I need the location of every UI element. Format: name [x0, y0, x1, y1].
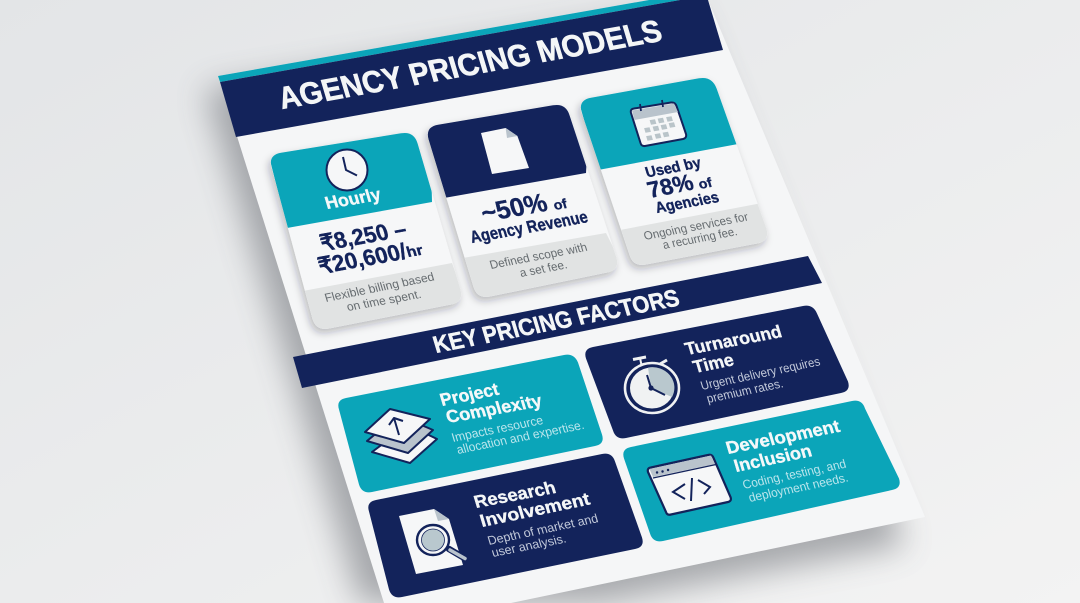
heading: Involvement — [477, 489, 592, 531]
description: on time spent. — [345, 287, 423, 314]
panel: Project Complexity — [338, 355, 603, 492]
icon: magnified document — [399, 509, 466, 574]
heading: Inclusion — [731, 440, 814, 476]
section banner: key pricing factors — [293, 256, 822, 388]
description: Coding, testing, and — [741, 457, 848, 492]
teal top stripe — [218, 0, 680, 82]
panel: Hourly card — [265, 133, 463, 337]
title banner — [220, 0, 723, 137]
usage stat: Used by — [643, 154, 704, 181]
usage stat — [643, 154, 721, 217]
heading — [471, 477, 592, 531]
heading: Time — [690, 349, 736, 377]
panel: Development Inclusion — [623, 401, 900, 541]
card label: Hourly — [322, 184, 383, 213]
description — [699, 354, 822, 406]
usage stat: Agencies — [653, 189, 721, 217]
price range: hr — [404, 243, 426, 261]
panel: Fixed fee card — [422, 105, 619, 305]
revenue stat: ~50% — [478, 189, 551, 228]
section heading: KEY PRICING FACTORS — [430, 286, 683, 359]
description: Ongoing services for — [642, 210, 750, 243]
heading: Turnaround — [682, 321, 784, 359]
description: Depth of market and — [486, 511, 600, 548]
usage stat: 78% — [644, 169, 696, 203]
heading: Development — [723, 416, 842, 458]
icon: clock — [326, 150, 368, 190]
price range: ₹20,600/ — [315, 238, 410, 279]
description: user analysis. — [490, 532, 568, 560]
description: a set fee. — [518, 257, 569, 280]
heading — [682, 321, 784, 377]
description: allocation and expertise. — [455, 418, 586, 457]
usage stat: of — [697, 175, 714, 192]
icon: stacked layers — [365, 409, 437, 463]
icon: stopwatch — [625, 357, 679, 413]
revenue stat: Agency Revenue — [468, 207, 590, 247]
heading: Project — [437, 379, 501, 410]
panel: Turnaround Time — [585, 306, 849, 438]
paper sheet — [218, 0, 925, 603]
description: Impacts resource — [450, 413, 545, 445]
description: a recurring fee. — [661, 224, 739, 252]
description: Flexible billing based — [323, 270, 436, 305]
heading: Complexity — [443, 390, 544, 427]
price range: ₹8,250 – — [317, 215, 409, 256]
price range — [315, 215, 426, 279]
description: premium rates. — [705, 376, 785, 406]
heading: Research — [471, 477, 558, 512]
icon: code window — [648, 455, 731, 515]
description: deployment needs. — [747, 471, 850, 505]
revenue stat: of — [552, 196, 569, 213]
revenue stat — [468, 189, 590, 247]
panel: Retainer card — [575, 78, 769, 273]
heading — [723, 416, 842, 476]
description: Urgent delivery requires — [699, 354, 822, 393]
title: AGENCY PRICING MODELS — [274, 13, 666, 116]
panel: Research Involvement — [368, 454, 643, 597]
icon: calendar — [631, 100, 686, 146]
description: Defined scope with — [488, 240, 589, 272]
icon: document — [481, 128, 529, 174]
heading — [437, 379, 544, 427]
